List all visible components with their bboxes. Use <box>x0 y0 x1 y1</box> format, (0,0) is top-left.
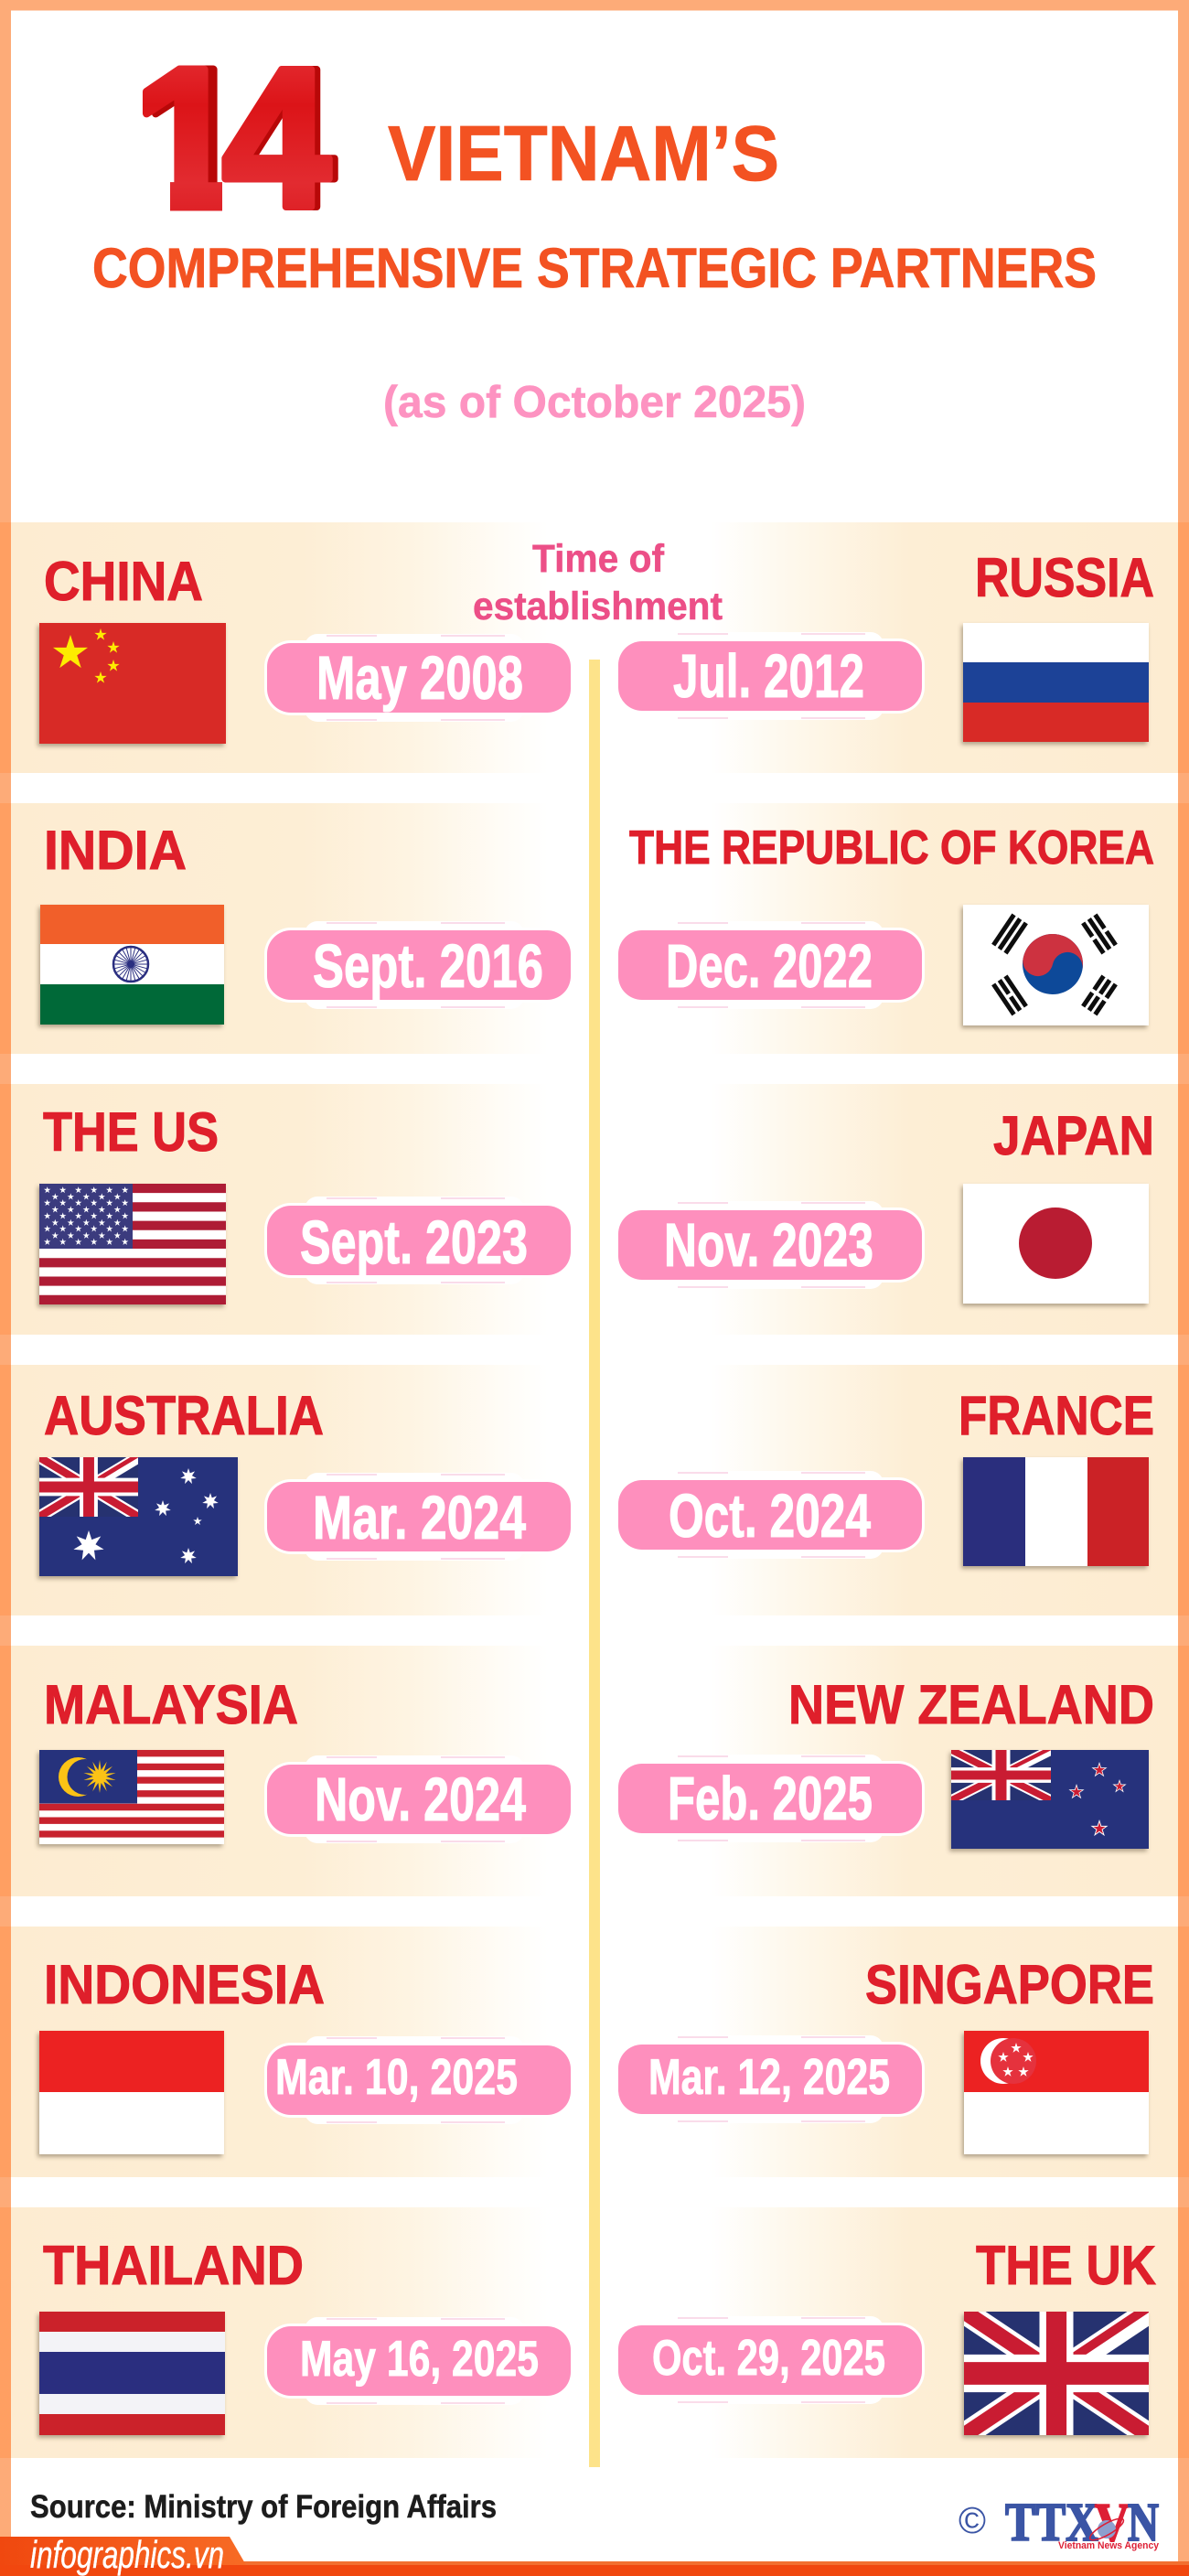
entry: India <box>40 820 573 1025</box>
footer tab: infographics.vn: infographics.vn <box>30 2533 224 2576</box>
name: Indonesia: INDONESIA <box>44 1954 325 2015</box>
name: The UK: THE UK <box>976 2235 1156 2296</box>
date: Sept. 2023 <box>264 1197 573 1284</box>
date: Oct. 2024: Oct. 2024 <box>669 1482 871 1551</box>
number 14: 4 <box>228 27 336 250</box>
name: Singapore: SINGAPORE <box>865 1954 1154 2015</box>
heading: time of establishment <box>473 537 723 628</box>
date: Mar. 10, 2025: Mar. 10, 2025 <box>275 2048 518 2105</box>
logo: TTXVN Vietnam News Agency: V <box>1095 2492 1130 2552</box>
flag: New Zealand <box>951 1748 1149 1849</box>
logo: TTXVN Vietnam News Agency: Vietnam News Agency <box>1058 2540 1160 2551</box>
date: May 16, 2025 <box>264 2317 573 2405</box>
name: Thailand: THAILAND <box>43 2235 304 2296</box>
name: New Zealand: NEW ZEALAND <box>788 1674 1154 1735</box>
flag: Republic of Korea <box>963 905 1149 1025</box>
panel: row 4 background <box>0 1365 1189 1615</box>
date: Feb. 2025: Feb. 2025 <box>668 1765 873 1833</box>
flag: Indonesia <box>39 2031 224 2154</box>
name: Russia: RUSSIA <box>975 547 1154 608</box>
date: Oct. 29, 2025: Oct. 29, 2025 <box>652 2329 885 2386</box>
logo: TTXVN Vietnam News Agency: © <box>959 2499 986 2541</box>
source note: Source: Ministry of Foreign Affairs <box>30 2489 497 2525</box>
date: Nov. 2023 <box>616 1201 925 1289</box>
flag: Singapore <box>964 2031 1149 2154</box>
date: Nov. 2024 <box>264 1755 573 1843</box>
logo: TTXVN Vietnam News Agency: TTX <box>1005 2492 1098 2552</box>
flag: France <box>963 1457 1149 1566</box>
flag: Russia <box>963 623 1149 742</box>
date: Feb. 2025 <box>616 1755 925 1842</box>
heading: time of establishment: Time of <box>532 537 665 581</box>
date: Jul. 2012 <box>616 632 925 720</box>
name: India: INDIA <box>44 820 187 881</box>
name: Japan: JAPAN <box>993 1105 1154 1166</box>
subtitle: date: (as of October 2025) <box>383 378 806 427</box>
flag: Japan <box>963 1184 1149 1304</box>
date: Mar. 10, 2025 <box>264 2036 573 2124</box>
panel: row 5 background <box>0 1646 1189 1896</box>
entry: Indonesia <box>39 1954 573 2154</box>
date: Nov. 2023: Nov. 2023 <box>664 1211 873 1280</box>
entry: Thailand <box>39 2235 573 2435</box>
entry: France <box>616 1385 1154 1566</box>
timeline line <box>589 660 600 2467</box>
entry: The US <box>39 1101 573 1304</box>
flag: The US <box>39 1184 226 1304</box>
entry: Japan <box>616 1105 1154 1304</box>
date: May 16, 2025: May 16, 2025 <box>300 2330 539 2387</box>
name: Malaysia: MALAYSIA <box>44 1674 298 1735</box>
entry: Russia <box>616 547 1154 742</box>
logo: TTXVN Vietnam News Agency: N <box>1128 2492 1159 2552</box>
date: Oct. 2024 <box>616 1471 925 1559</box>
date: Sept. 2023: Sept. 2023 <box>300 1208 528 1277</box>
date: Nov. 2024: Nov. 2024 <box>315 1766 526 1834</box>
flag: Australia <box>39 1455 238 1576</box>
name: China: CHINA <box>44 551 203 612</box>
number 14: 1 <box>134 27 240 250</box>
heading: time of establishment: establishment <box>473 585 723 628</box>
date: Dec. 2022: Dec. 2022 <box>666 932 873 1001</box>
date: Dec. 2022 <box>616 921 925 1009</box>
date: May 2008 <box>264 634 573 722</box>
panel: row 3 background <box>0 1084 1189 1335</box>
name: Australia: AUSTRALIA <box>44 1385 324 1446</box>
number 14: 1 <box>143 27 249 250</box>
panel: row 1 background <box>0 522 1189 773</box>
panel: row 2 background <box>0 803 1189 1054</box>
name: The US: THE US <box>43 1101 219 1163</box>
date: May 2008: May 2008 <box>316 644 523 713</box>
logo: TTXVN Vietnam News Agency <box>959 2492 1160 2552</box>
date: Oct. 29, 2025 <box>616 2316 925 2404</box>
footer bar <box>0 2561 1189 2576</box>
flag: China <box>39 623 226 744</box>
entry: Singapore <box>616 1954 1154 2154</box>
entry: The UK <box>616 2235 1156 2435</box>
date: Mar. 2024 <box>264 1473 573 1561</box>
number 14: 4 <box>222 27 330 250</box>
name: France: FRANCE <box>959 1385 1154 1446</box>
number 14 <box>143 66 338 210</box>
title: Vietnam's: VIETNAM’S <box>388 111 779 198</box>
flag: Malaysia <box>39 1750 224 1844</box>
entry: China <box>39 551 573 744</box>
date: Mar. 2024: Mar. 2024 <box>313 1484 526 1552</box>
date: Jul. 2012: Jul. 2012 <box>673 642 864 711</box>
flag: The UK <box>964 2307 1149 2435</box>
date: Sept. 2016: Sept. 2016 <box>313 932 543 1001</box>
flag: India <box>40 905 224 1025</box>
entry: Australia <box>39 1385 573 1576</box>
date: Sept. 2016 <box>264 921 573 1009</box>
date: Mar. 12, 2025: Mar. 12, 2025 <box>648 2048 890 2105</box>
entry: New Zealand <box>616 1674 1154 1849</box>
entry: Malaysia <box>39 1674 573 1844</box>
entry: Republic of Korea <box>616 821 1154 1025</box>
flag: Thailand <box>39 2312 225 2435</box>
panel: row 6 background <box>0 1927 1189 2177</box>
panel: row 7 background <box>0 2207 1189 2458</box>
date: Mar. 12, 2025 <box>616 2035 925 2123</box>
